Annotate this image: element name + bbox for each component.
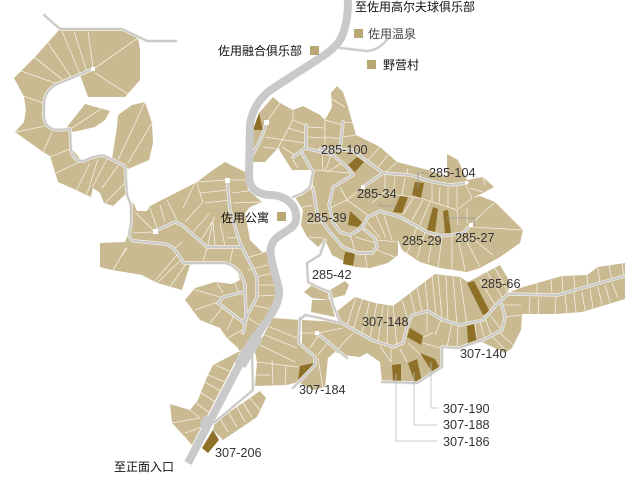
highlighted lots xyxy=(202,113,490,453)
lot numbers: 307-184 xyxy=(299,383,346,397)
lot numbers: 285-66 xyxy=(481,277,521,291)
lot numbers: 285-104 xyxy=(429,166,476,180)
road end markers xyxy=(91,67,473,335)
leader lines xyxy=(380,173,474,441)
lot numbers: 285-42 xyxy=(312,268,352,282)
lot numbers: 307-188 xyxy=(443,418,490,432)
minor roads xyxy=(44,15,625,422)
place names: 佐用公寓 xyxy=(221,210,269,225)
lot numbers: 307-190 xyxy=(443,402,490,416)
lot numbers: 285-100 xyxy=(321,143,368,157)
lot numbers: 307-140 xyxy=(460,347,507,361)
lot numbers: 285-29 xyxy=(402,234,442,248)
place markers xyxy=(277,29,376,221)
place names: 至佐用高尔夫球俱乐部 xyxy=(355,0,475,14)
place names: 佐用融合俱乐部 xyxy=(218,43,302,58)
place names: 佐用温泉 xyxy=(368,27,416,41)
lot numbers xyxy=(215,143,521,460)
lot numbers: 285-27 xyxy=(455,231,495,245)
main road xyxy=(188,0,348,463)
lot numbers: 307-206 xyxy=(215,446,262,460)
lot numbers: 307-186 xyxy=(443,435,490,449)
place names xyxy=(114,0,475,474)
place names: 至正面入口 xyxy=(114,460,174,474)
lot numbers: 285-39 xyxy=(307,211,347,225)
place names: 野营村 xyxy=(383,58,419,72)
lot numbers: 307-148 xyxy=(362,315,409,329)
lot numbers: 285-34 xyxy=(357,187,397,201)
